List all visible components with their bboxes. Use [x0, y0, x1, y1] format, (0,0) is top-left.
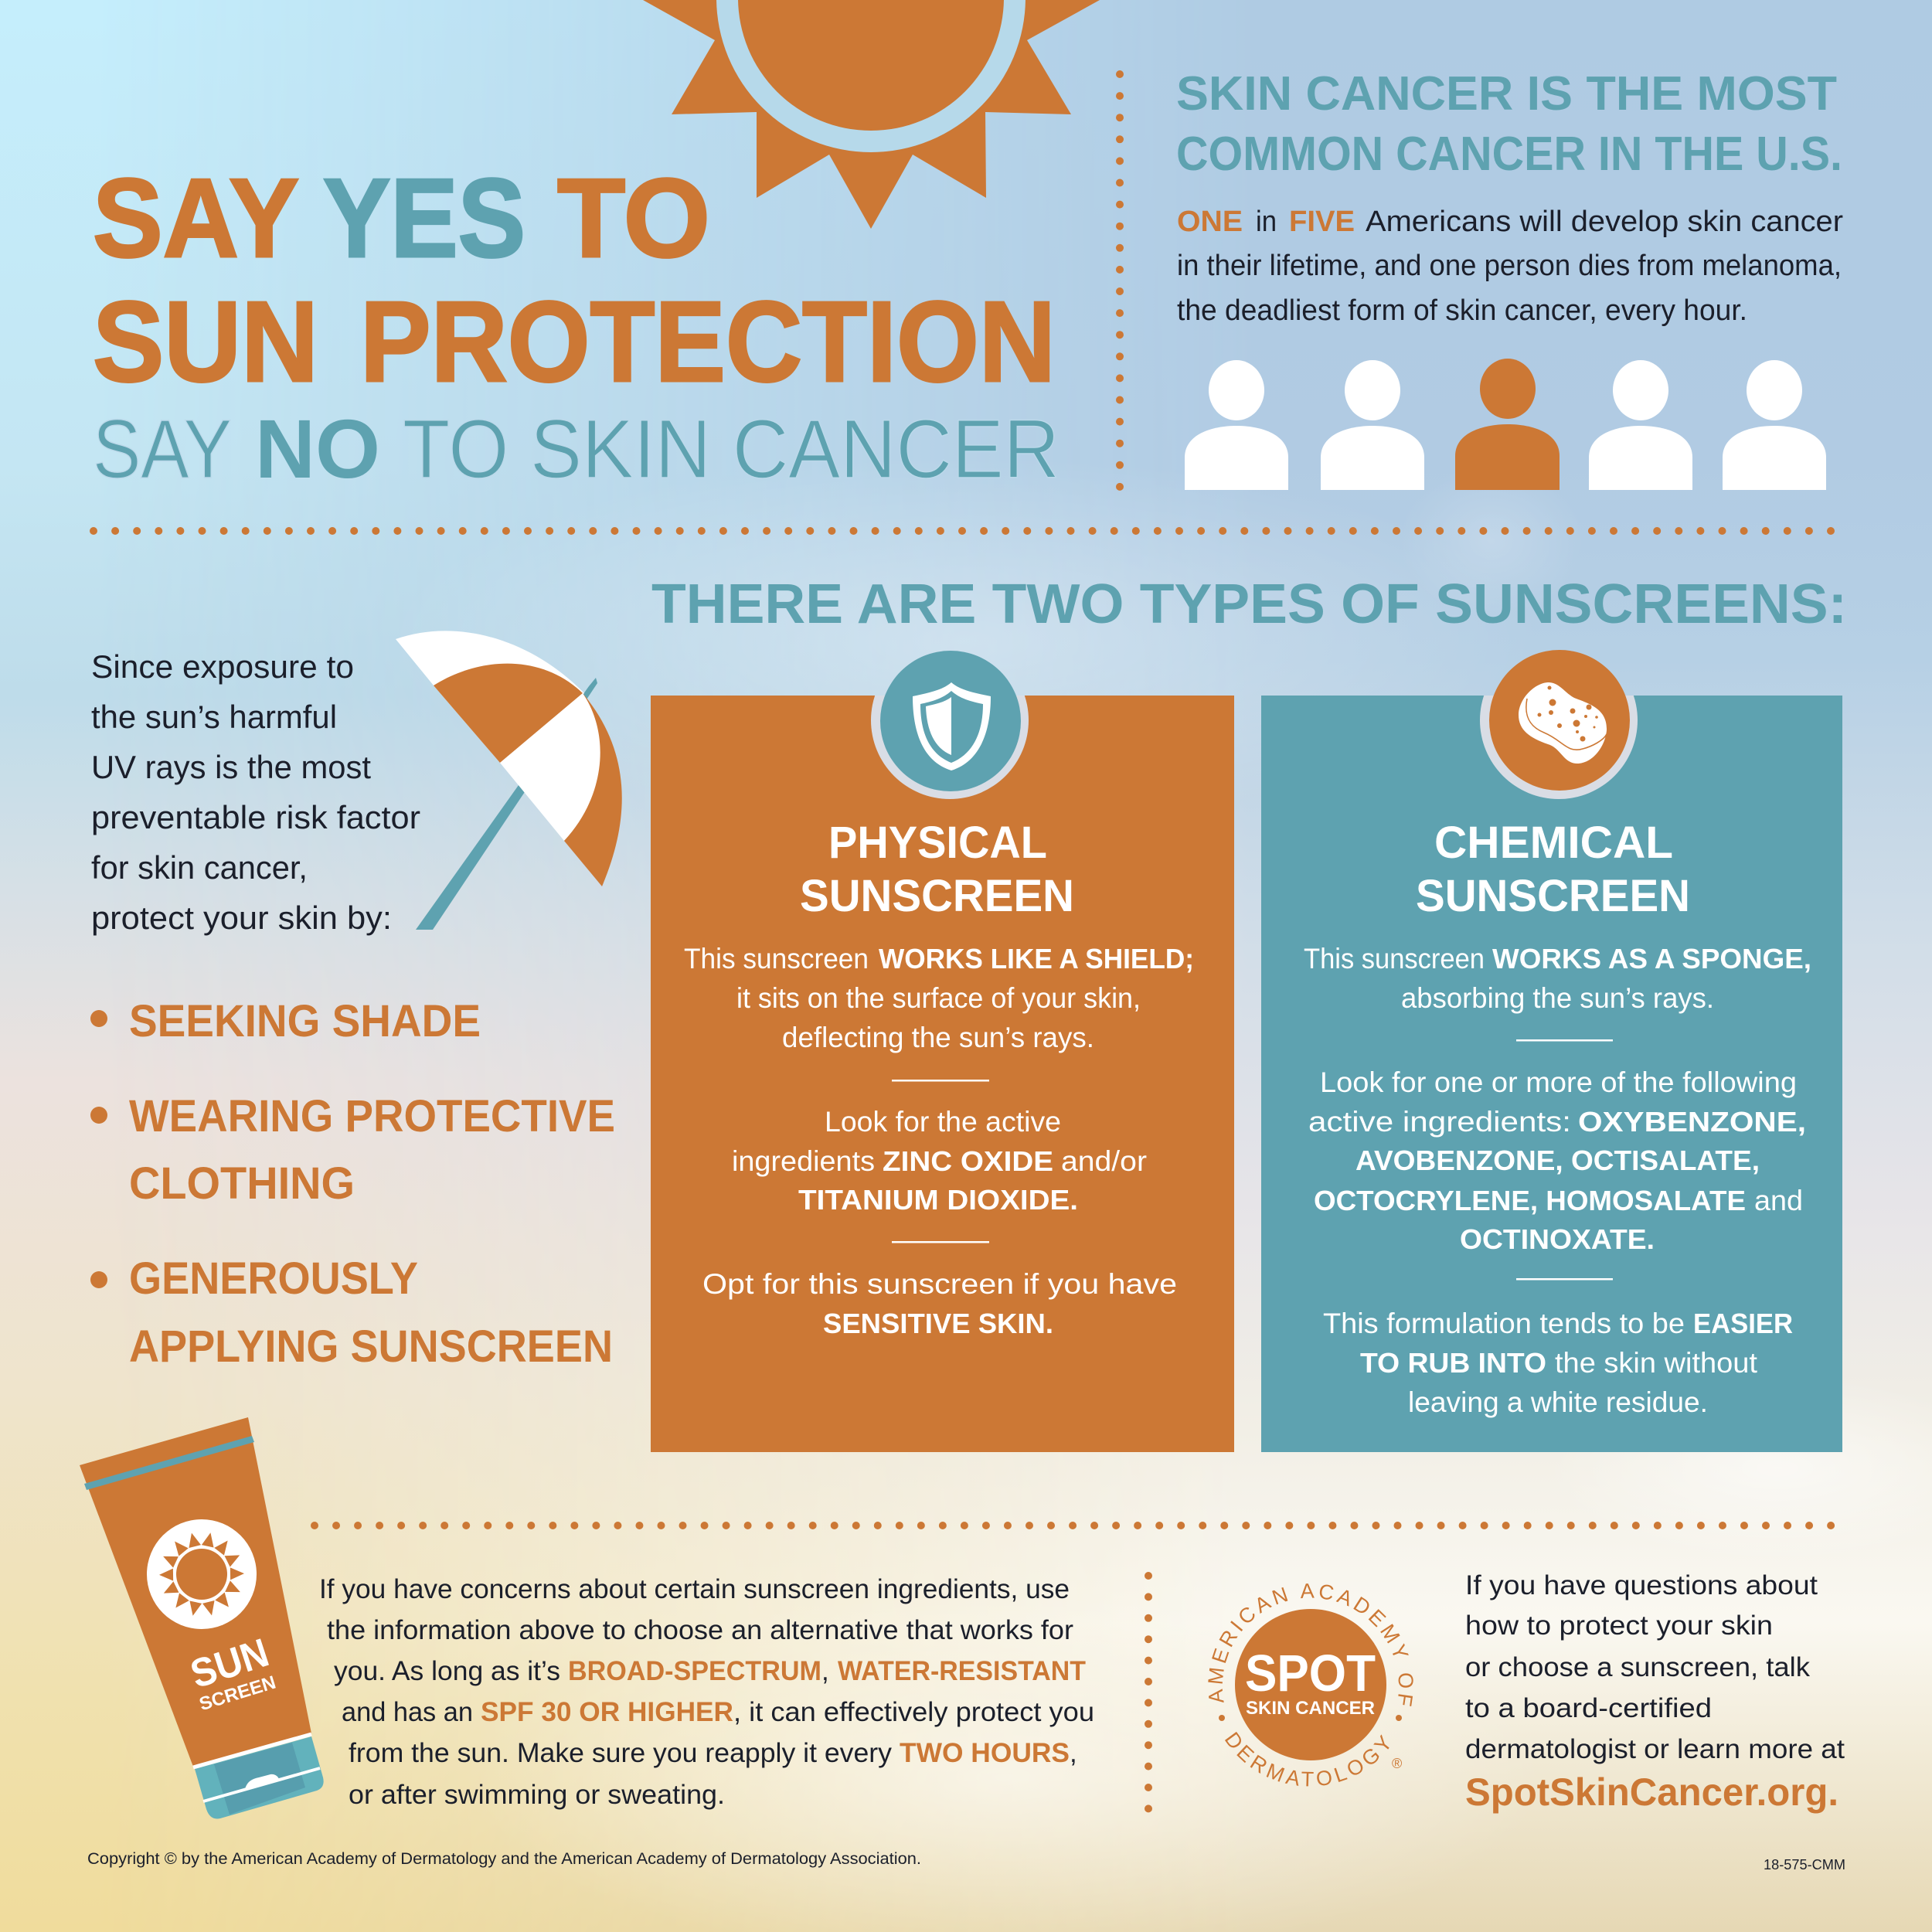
heading: skin cancer statistic [1176, 67, 1842, 181]
subtitle: SAY [93, 402, 232, 495]
heading: physical sunscreen: PHYSICAL [828, 818, 1047, 868]
icon: sun [643, 0, 1100, 229]
list: protective measures: SEEKING SHADE [129, 996, 481, 1046]
heading: physical sunscreen: SUNSCREEN [800, 871, 1074, 921]
text: active ingredients: OCTINOXATE. [1460, 1223, 1655, 1255]
title: SAY [93, 155, 299, 281]
heading: chemical sunscreen: SUNSCREEN [1416, 871, 1690, 921]
title: PROTECTION [360, 278, 1056, 406]
list: protective measures: GENEROUSLY [129, 1253, 418, 1304]
text block: ingredient concerns: you. As long as it’s [334, 1656, 560, 1686]
text: formulation note: leaving a white residue. [1408, 1386, 1708, 1418]
logo: AAD spot skin cancer: AMERICAN ACADEMY OF [1208, 1583, 1413, 1706]
list: protective measures: CLOTHING [129, 1158, 355, 1209]
list: protective measures: WEARING PROTECTIVE [129, 1091, 615, 1141]
text block: ingredient concerns: , [1070, 1738, 1077, 1768]
text: active ingredients [1308, 1066, 1806, 1255]
copyright: Copyright © by the American Academy of Dermatology and the American Academy of Dermatology Association. [87, 1850, 921, 1868]
logo: AAD spot skin cancer: DERMATOLOGY [1225, 1731, 1389, 1787]
text block: one in five: in their lifetime, and one person dies from melanoma, [1177, 250, 1842, 282]
title: TO [557, 155, 710, 281]
icon: umbrella [396, 631, 622, 930]
text block: ingredient concerns: from the sun. Make sure you reapply it every [349, 1738, 892, 1768]
text block: intro [91, 648, 420, 936]
text: active ingredients: Look for one or more of the following [1320, 1066, 1797, 1098]
text block: one in five: the deadliest form of skin cancer, every hour. [1177, 294, 1747, 327]
text block: questions: to a board-certified [1465, 1693, 1712, 1723]
text block: one in five: in [1256, 206, 1277, 238]
logo: AAD spot skin cancer: ® [1392, 1756, 1402, 1771]
text block: questions: dermatologist or learn more at [1465, 1734, 1845, 1764]
text: how it works: WORKS LIKE A SHIELD; [879, 943, 1194, 975]
text: active ingredients [732, 1106, 1147, 1216]
text block: intro: UV rays is the most [91, 749, 371, 785]
text block: ingredient concerns: TWO HOURS [900, 1738, 1070, 1768]
text block: intro: for skin cancer, [91, 849, 308, 886]
text block: questions [1465, 1570, 1845, 1814]
text: how it works: WORKS AS A SPONGE, [1492, 943, 1811, 975]
text block: one in five: Americans will develop skin cancer [1366, 206, 1843, 238]
logo: AAD spot skin cancer: SPOT [1245, 1645, 1376, 1702]
text block: questions: or choose a sunscreen, talk [1465, 1652, 1811, 1682]
text: active ingredients: OXYBENZONE, [1578, 1106, 1806, 1138]
text: formulation note: EASIER [1693, 1308, 1793, 1339]
document code: 18-575-CMM [1764, 1857, 1845, 1872]
label: sun screen: SCREEN [197, 1672, 278, 1715]
text block: ingredient concerns: SPF 30 OR HIGHER [481, 1697, 733, 1727]
icon: tube sun emblem [147, 1519, 257, 1629]
heading: chemical sunscreen [1416, 818, 1690, 921]
text block: intro: Since exposure to [91, 648, 354, 685]
logo: AAD spot skin cancer [1208, 1583, 1413, 1787]
text block: ingredient concerns: or after swimming or sweating. [349, 1780, 725, 1810]
icon: sponge [1480, 641, 1638, 799]
icon: sunscreen tube [80, 1417, 324, 1819]
text block: ingredient concerns: , it can effectively protect you [733, 1697, 1094, 1727]
subtitle [93, 402, 1060, 495]
text: recommendation: SENSITIVE SKIN. [823, 1308, 1053, 1339]
text block: one in five: ONE [1177, 206, 1243, 238]
list: protective measures: APPLYING SUNSCREEN [129, 1321, 613, 1372]
text: how it works: it sits on the surface of your skin, [736, 982, 1141, 1014]
text: how it works: This sunscreen [1304, 943, 1485, 975]
text block: ingredient concerns: the information above to choose an alternative that works for [327, 1615, 1073, 1645]
text block: ingredient concerns: BROAD-SPECTRUM [568, 1656, 821, 1686]
panel: chemical sunscreen [1261, 641, 1842, 1452]
text: recommendation [702, 1268, 1177, 1339]
title [93, 155, 1056, 406]
text block: questions: If you have questions about [1465, 1570, 1818, 1600]
heading: physical sunscreen [800, 818, 1074, 921]
heading: two types of sunscreens: THERE ARE TWO TYPES OF SUNSCREENS: [651, 573, 1847, 635]
text: how it works: absorbing the sun’s rays. [1401, 982, 1714, 1014]
text: active ingredients: ZINC OXIDE [883, 1145, 1053, 1177]
text block: ingredient concerns: WATER-RESISTANT [838, 1656, 1086, 1686]
label: sun screen: SUN [185, 1631, 274, 1697]
icon row: five people [1185, 359, 1826, 490]
text: recommendation: Opt for this sunscreen if you have [702, 1268, 1177, 1300]
text block: questions: how to protect your skin [1465, 1611, 1773, 1641]
text: how it works: deflecting the sun’s rays. [782, 1022, 1094, 1053]
text block: ingredient concerns: If you have concerns about certain sunscreen ingredients, use [319, 1574, 1070, 1604]
text block: intro: the sun’s harmful [91, 699, 337, 735]
text block: intro: preventable risk factor [91, 799, 420, 835]
text: active ingredients: AVOBENZONE, OCTISALATE, [1355, 1145, 1760, 1176]
text: active ingredients: Look for the active [825, 1106, 1061, 1138]
text: active ingredients: ingredients [732, 1145, 875, 1177]
text block: one in five [1177, 206, 1843, 327]
heading: skin cancer statistic: COMMON CANCER IN THE U.S. [1176, 128, 1842, 181]
text: formulation note: This formulation tends to be [1323, 1308, 1685, 1339]
subtitle: NO [255, 402, 380, 495]
text: active ingredients: OCTOCRYLENE, HOMOSALATE [1314, 1185, 1746, 1216]
logo: AAD spot skin cancer: SKIN CANCER [1246, 1698, 1375, 1719]
title: SUN [93, 278, 318, 406]
heading: chemical sunscreen: CHEMICAL [1434, 818, 1673, 868]
text: active ingredients: active ingredients: [1308, 1106, 1571, 1138]
text: active ingredients: and/or [1061, 1145, 1147, 1177]
text block: questions: SpotSkinCancer.org. [1465, 1770, 1838, 1814]
heading: skin cancer statistic: SKIN CANCER IS THE MOST [1176, 67, 1837, 121]
text: formulation note: the skin without [1555, 1347, 1758, 1379]
text block: intro: protect your skin by: [91, 900, 392, 936]
panel: physical sunscreen [651, 641, 1234, 1452]
text: active ingredients: and [1754, 1185, 1803, 1216]
text: formulation note: TO RUB INTO [1360, 1347, 1546, 1379]
title: YES [323, 155, 526, 281]
text block: ingredient concerns: , [821, 1656, 829, 1686]
text block: ingredient concerns: and has an [342, 1697, 473, 1727]
text: active ingredients: TITANIUM DIOXIDE. [798, 1184, 1078, 1216]
list: protective measures [90, 996, 615, 1372]
text: how it works [1304, 943, 1811, 1014]
text: how it works: This sunscreen [684, 943, 869, 975]
text: how it works [684, 943, 1194, 1053]
text: formulation note [1323, 1308, 1793, 1418]
text block: one in five: FIVE [1289, 206, 1355, 238]
text block: ingredient concerns [319, 1574, 1094, 1810]
subtitle: TO SKIN CANCER [403, 402, 1060, 495]
icon: shield [871, 641, 1029, 799]
